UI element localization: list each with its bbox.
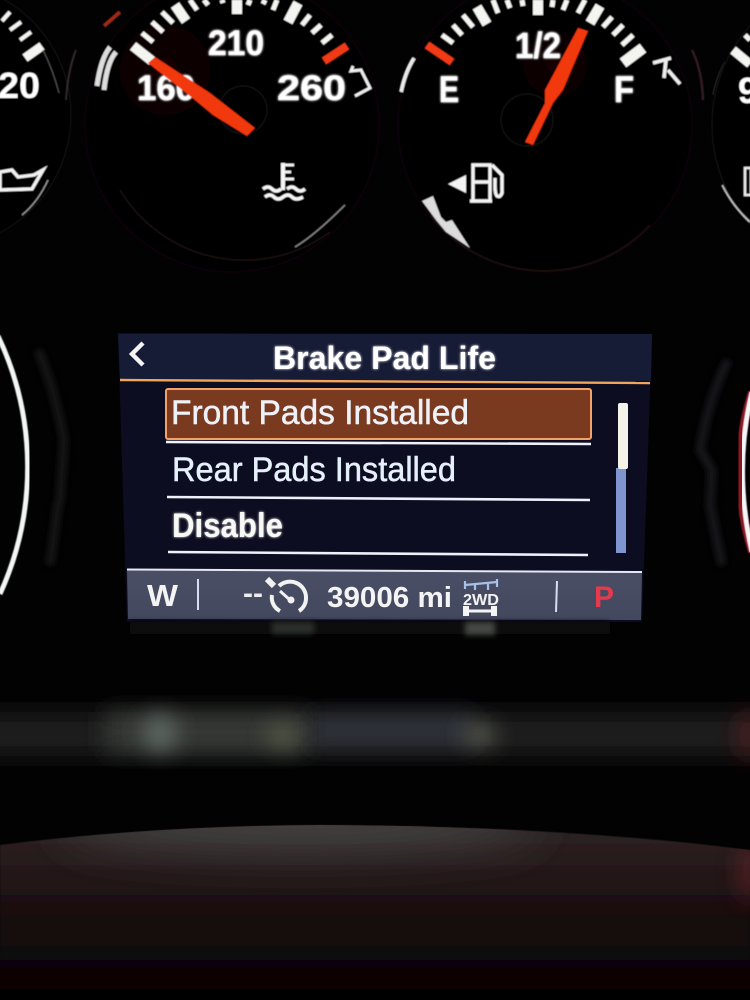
screen header <box>118 334 652 383</box>
menu row: rear pads: Rear Pads Installed <box>172 451 456 489</box>
fuel needle <box>525 28 588 145</box>
gear P: P <box>594 581 614 614</box>
icon: speedometer <box>267 579 306 611</box>
left end mark <box>401 58 414 92</box>
right end mark <box>351 66 370 96</box>
fuel gauge <box>398 0 692 272</box>
label 210: 210 <box>208 24 264 63</box>
right side arc gauge <box>700 360 750 565</box>
icon: fuel pump <box>448 165 502 201</box>
screen title: Brake Pad Life <box>273 340 496 376</box>
gauge lower right mark <box>295 205 345 247</box>
right partial gauge <box>712 0 750 273</box>
scrollbar <box>616 403 628 553</box>
left end mark <box>97 47 116 90</box>
odometer: 39006 mi <box>327 582 452 614</box>
reflection below screen <box>130 622 610 635</box>
gear range W: W <box>147 578 179 613</box>
temperature gauge <box>85 0 379 272</box>
selected menu row <box>166 389 591 439</box>
empty zone tick <box>427 45 452 62</box>
lower dash surface <box>0 824 750 990</box>
gauge lower left mark <box>422 196 470 248</box>
back arrow <box>132 343 143 365</box>
selected menu row: Front Pads Installed <box>171 394 469 432</box>
dim trim between gauges <box>66 50 725 100</box>
right end mark <box>653 58 680 84</box>
menu row: disable: Disable <box>172 507 283 545</box>
dash trim band <box>0 711 750 759</box>
icon: 2WD drivetrain: 2WD <box>463 592 499 609</box>
temperature needle <box>148 57 255 136</box>
left partial gauge <box>0 0 71 248</box>
left side arc gauge <box>0 336 64 594</box>
label 160: 160 <box>137 69 195 108</box>
label E: E <box>439 69 459 110</box>
red zone tick <box>324 46 347 61</box>
icon: 2WD drivetrain <box>463 579 499 616</box>
label one half: 1/2 <box>515 25 561 66</box>
label 260: 260 <box>277 69 346 108</box>
status bar <box>127 570 642 620</box>
display screen <box>118 333 652 622</box>
label F: F <box>614 69 634 110</box>
cruise dashes: -- <box>243 578 263 610</box>
icon: coolant temperature <box>263 163 305 199</box>
